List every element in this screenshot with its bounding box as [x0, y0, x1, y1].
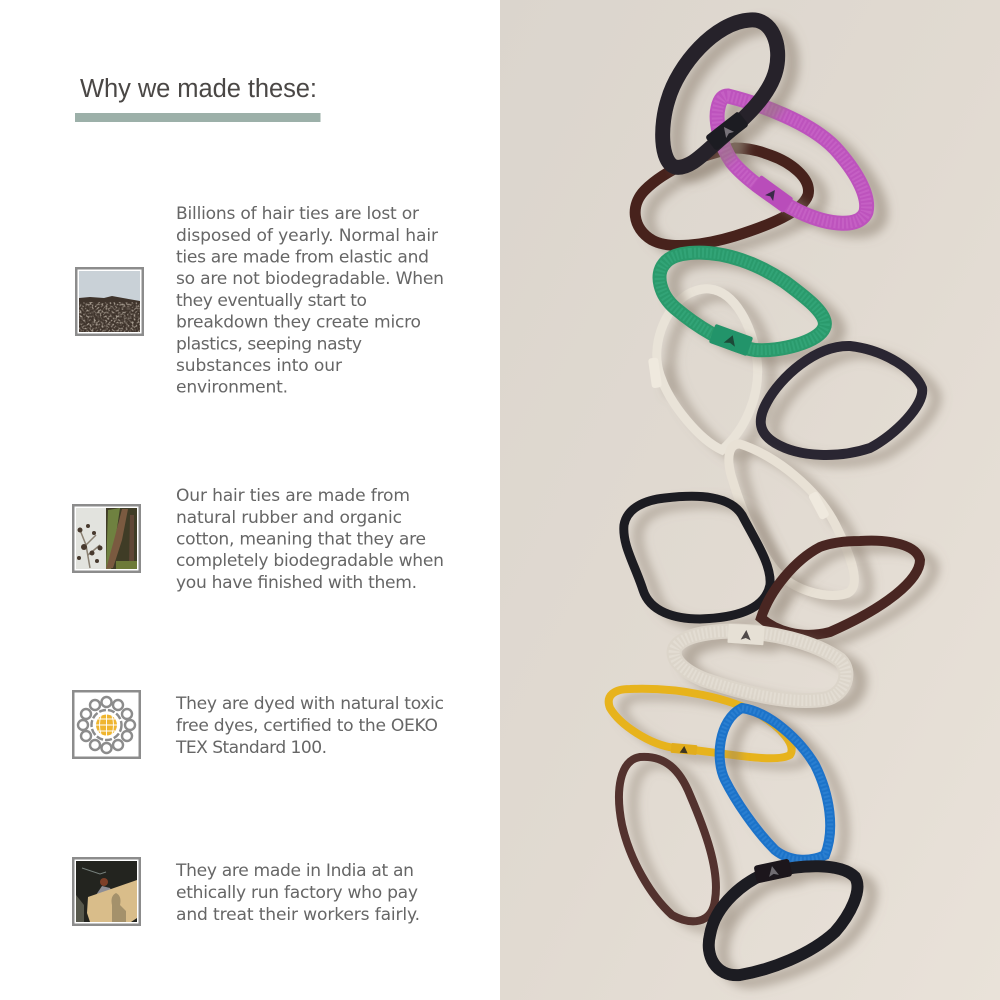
thumbnail: cotton and rubber trees: [73, 505, 140, 572]
text block: natural dyes: [175, 694, 444, 758]
text block: plastics problem: so are not biodegradable. When: [176, 269, 444, 289]
text block: plastics problem: they eventually start to: [176, 291, 367, 311]
hair tie: magenta: [717, 96, 867, 223]
hair tie: blue: [720, 708, 830, 860]
text block: ethical factory: and treat their workers fairly.: [176, 905, 420, 925]
hair tie: black ring middle: [624, 496, 770, 619]
heading underline bar: [75, 113, 320, 122]
hair tie: dark brown upper: [635, 148, 808, 246]
text block: ethical factory: They are made in India at an: [175, 861, 414, 881]
text block: biodegradable materials: Our hair ties are made from: [176, 486, 410, 506]
hair tie: yellow: [609, 689, 792, 758]
hair tie: charcoal ring: [761, 346, 922, 455]
hair tie: cream upper: [648, 289, 758, 450]
text block: biodegradable materials: [176, 486, 444, 593]
hair tie: chestnut ring: [761, 541, 920, 635]
icon: OEKO-TEX logo: [73, 691, 140, 758]
thumbnail: factory worker photo: [73, 858, 140, 925]
hair tie: brown lower: [619, 757, 716, 921]
text block: plastics problem: ties are made from elastic and: [176, 248, 429, 268]
text block: biodegradable materials: cotton, meaning that they are: [176, 530, 426, 550]
hair tie: black upper: [663, 20, 778, 167]
text block: plastics problem: [176, 204, 444, 398]
heading: Why we made these:: [80, 75, 317, 103]
white text panel: [0, 0, 500, 1000]
thumbnail: landfill photo: [76, 268, 143, 335]
text block: natural dyes: They are dyed with natural toxic: [175, 694, 444, 714]
text block: ethical factory: ethically run factory who pay: [176, 883, 418, 903]
text block: plastics problem: environment.: [176, 378, 288, 398]
text block: ethical factory: [175, 861, 420, 925]
text block: natural dyes: TEX Standard 100.: [175, 738, 327, 758]
hair tie: beige: [674, 624, 846, 701]
hair tie: green: [660, 253, 825, 356]
text block: plastics problem: substances into our: [176, 356, 343, 376]
text block: plastics problem: Billions of hair ties are lost or: [176, 204, 420, 224]
text block: plastics problem: plastics, seeping nasty: [176, 334, 362, 354]
text block: biodegradable materials: completely biodegradable when: [176, 551, 444, 571]
text block: plastics problem: disposed of yearly. Normal hair: [176, 226, 439, 246]
text block: plastics problem: breakdown they create micro: [176, 312, 421, 332]
text block: biodegradable materials: natural rubber and organic: [176, 508, 402, 528]
text block: natural dyes: free dyes, certified to the OEKO: [176, 716, 438, 736]
text block: biodegradable materials: you have finished with them.: [176, 573, 417, 593]
hair tie: black lower: [709, 858, 857, 975]
photo panel background: [500, 0, 1000, 1000]
hair tie: cream lower: [729, 444, 854, 595]
